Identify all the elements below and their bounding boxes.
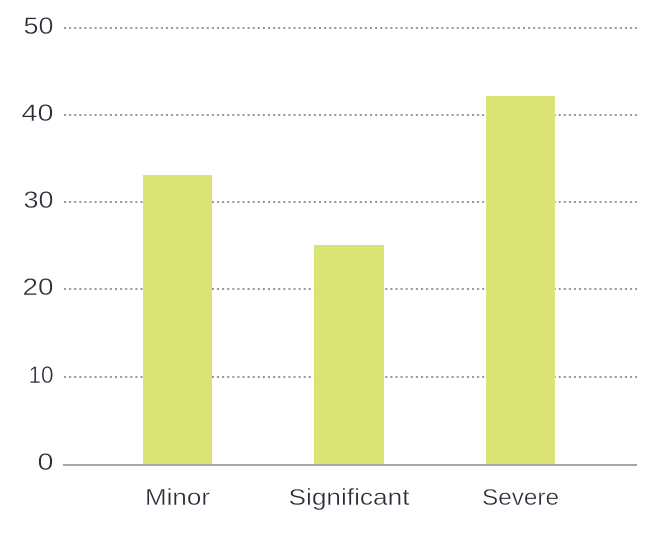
bar: Severe 42: [486, 96, 555, 465]
x-axis labels: [145, 484, 559, 510]
bars: [143, 96, 555, 465]
bar: Minor 33: [143, 175, 212, 465]
y-axis labels: [22, 13, 54, 476]
x-axis line: [63, 464, 637, 466]
bar: Significant 25: [314, 245, 384, 465]
y-axis labels: 40: [22, 100, 54, 127]
x-axis labels: Significant: [288, 484, 410, 510]
x-axis labels: Minor: [145, 484, 210, 510]
y-axis labels: 30: [24, 187, 54, 214]
x-axis labels: Severe: [482, 484, 559, 510]
y-axis labels: 50: [24, 13, 54, 40]
y-axis labels: 10: [28, 362, 54, 389]
y-axis labels: 0: [38, 449, 54, 476]
y-axis labels: 20: [22, 274, 54, 301]
